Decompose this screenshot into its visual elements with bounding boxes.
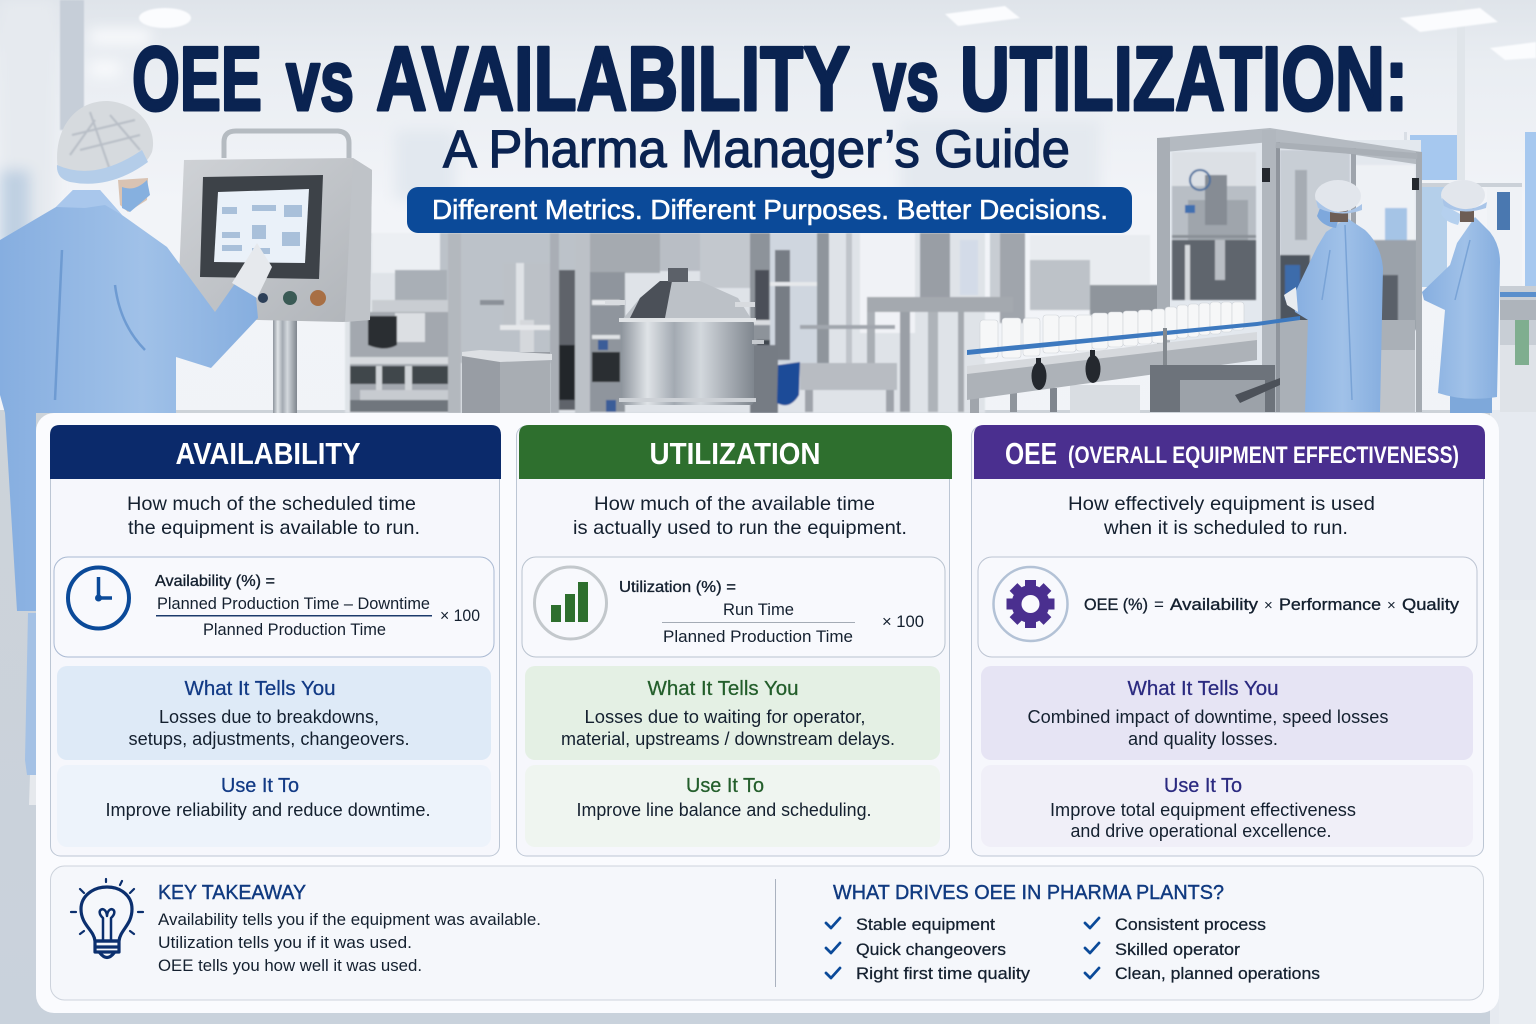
OEE: use it to — [981, 765, 1473, 847]
stainless tank — [605, 268, 764, 405]
availability: use it to — [57, 765, 491, 847]
OEE: what it tells you — [981, 666, 1473, 760]
OEE formula box — [978, 557, 1477, 657]
icon: clock — [68, 568, 129, 628]
availability: what it tells you: What It Tells You — [184, 678, 336, 700]
availability formula: Planned Production Time – Downtime — [157, 594, 430, 613]
utilization header — [519, 425, 952, 479]
ceiling lights — [139, 6, 1536, 60]
key takeaway text: Utilization tells you if it was used. — [158, 933, 412, 952]
utilization formula: Planned Production Time — [663, 627, 853, 646]
availability: what it tells you: setups, adjustments, changeovers. — [128, 729, 410, 749]
conveyor — [967, 322, 1257, 355]
foreground filling machine and conveyor — [967, 128, 1536, 413]
utilization formula: Utilization (%) = — [619, 579, 736, 596]
utilization: what it tells you: What It Tells You — [648, 678, 798, 700]
rear station behind worker — [1422, 183, 1522, 187]
icon: light bulb — [71, 879, 143, 958]
tagline banner — [407, 187, 1132, 233]
title: vs — [873, 33, 939, 129]
availability formula box — [54, 557, 494, 657]
OEE formula: = — [1154, 595, 1164, 614]
bottles — [980, 302, 1244, 358]
title: vs — [286, 33, 354, 129]
OEE formula: Availability — [1170, 595, 1259, 614]
subtitle: A Pharma Manager’s Guide — [443, 120, 1070, 179]
person: operator at panel — [0, 101, 272, 805]
utilization: what it tells you: Losses due to waiting for operator, — [584, 707, 866, 727]
driver list: Quick changeovers — [856, 940, 1006, 959]
utilization formula box — [522, 557, 945, 657]
OEE header — [974, 425, 1485, 479]
OEE formula: Quality — [1402, 595, 1460, 614]
driver list: Skilled operator — [1115, 940, 1240, 959]
panel: availability — [50, 425, 501, 856]
availability: what it tells you: Losses due to breakdowns, — [159, 707, 379, 727]
utilization: use it to: Improve line balance and scheduling. — [576, 800, 872, 820]
availability header: AVAILABILITY — [176, 436, 361, 471]
person: right worker 2 — [1422, 180, 1500, 413]
OEE formula: Performance — [1279, 595, 1381, 614]
main white panel — [36, 413, 1499, 1013]
OEE: what it tells you: and quality losses. — [1128, 729, 1278, 749]
OEE definition — [1068, 493, 1375, 539]
panel: bottom takeaway strip — [50, 866, 1484, 1000]
availability formula: × 100 — [440, 606, 480, 625]
utilization formula: × 100 — [882, 612, 924, 631]
availability header — [50, 425, 501, 479]
OEE definition: How effectively equipment is used — [1068, 493, 1375, 515]
OEE: use it to: Improve total equipment effectiveness — [1050, 800, 1356, 820]
person: right worker 1 — [1284, 180, 1383, 412]
utilization formula: Run Time — [723, 600, 794, 619]
low stainless cabinet — [462, 350, 552, 413]
OEE formula: × — [1387, 597, 1396, 614]
key takeaway text: Availability tells you if the equipment was available. — [158, 910, 541, 929]
availability formula — [155, 573, 480, 639]
what drives OEE — [826, 882, 1320, 983]
utilization: use it to: Use It To — [686, 775, 764, 797]
utilization: what it tells you: material, upstreams / downstream delays. — [561, 729, 895, 749]
OEE: what it tells you: Combined impact of downtime, speed losses — [1028, 707, 1388, 727]
availability: use it to: Improve reliability and reduce downtime. — [106, 800, 430, 820]
title: OEE — [132, 29, 262, 130]
key takeaway text: OEE tells you how well it was used. — [158, 956, 422, 975]
OEE formula: OEE (%) — [1084, 595, 1148, 614]
title: AVAILABILITY — [376, 29, 850, 130]
utilization formula — [619, 579, 924, 646]
OEE formula — [1084, 595, 1460, 614]
utilization definition: is actually used to run the equipment. — [573, 517, 907, 539]
background machinery — [345, 233, 1160, 413]
what drives OEE: WHAT DRIVES OEE IN PHARMA PLANTS? — [833, 882, 1224, 904]
OEE definition: when it is scheduled to run. — [1103, 517, 1348, 539]
panel: utilization — [516, 425, 952, 856]
panel: OEE — [972, 425, 1485, 856]
utilization: use it to — [525, 765, 940, 847]
availability formula: Planned Production Time — [203, 620, 386, 639]
availability: use it to: Use It To — [221, 775, 299, 797]
driver list: Clean, planned operations — [1115, 964, 1320, 983]
availability definition: the equipment is available to run. — [128, 517, 420, 539]
key takeaway text — [158, 882, 541, 975]
driver list: Stable equipment — [856, 915, 995, 934]
OEE header: OEE — [1005, 436, 1057, 471]
driver list — [856, 915, 1320, 983]
key takeaway text: KEY TAKEAWAY — [158, 882, 306, 904]
title: UTILIZATION: — [960, 29, 1408, 130]
utilization header: UTILIZATION — [650, 436, 820, 471]
availability: what it tells you — [57, 666, 491, 760]
OEE: what it tells you: What It Tells You — [1128, 678, 1278, 700]
control panel with touchscreen — [178, 131, 372, 415]
driver list: Right first time quality — [856, 964, 1031, 983]
tagline banner: Different Metrics. Different Purposes. Better Decisions. — [432, 194, 1108, 225]
availability definition: How much of the scheduled time — [127, 493, 416, 515]
icon: gear — [994, 567, 1068, 641]
icon: bar chart — [534, 567, 606, 639]
title — [132, 29, 1408, 130]
OEE: use it to: and drive operational excellence. — [1070, 821, 1332, 841]
utilization definition: How much of the available time — [594, 493, 875, 515]
OEE: use it to: Use It To — [1164, 775, 1242, 797]
utilization definition — [573, 493, 907, 539]
utilization: what it tells you — [525, 666, 940, 760]
driver list: Consistent process — [1115, 915, 1266, 934]
OEE formula: × — [1264, 597, 1273, 614]
availability formula: Availability (%) = — [155, 573, 275, 590]
availability definition — [127, 493, 420, 539]
check icons — [826, 918, 1099, 978]
